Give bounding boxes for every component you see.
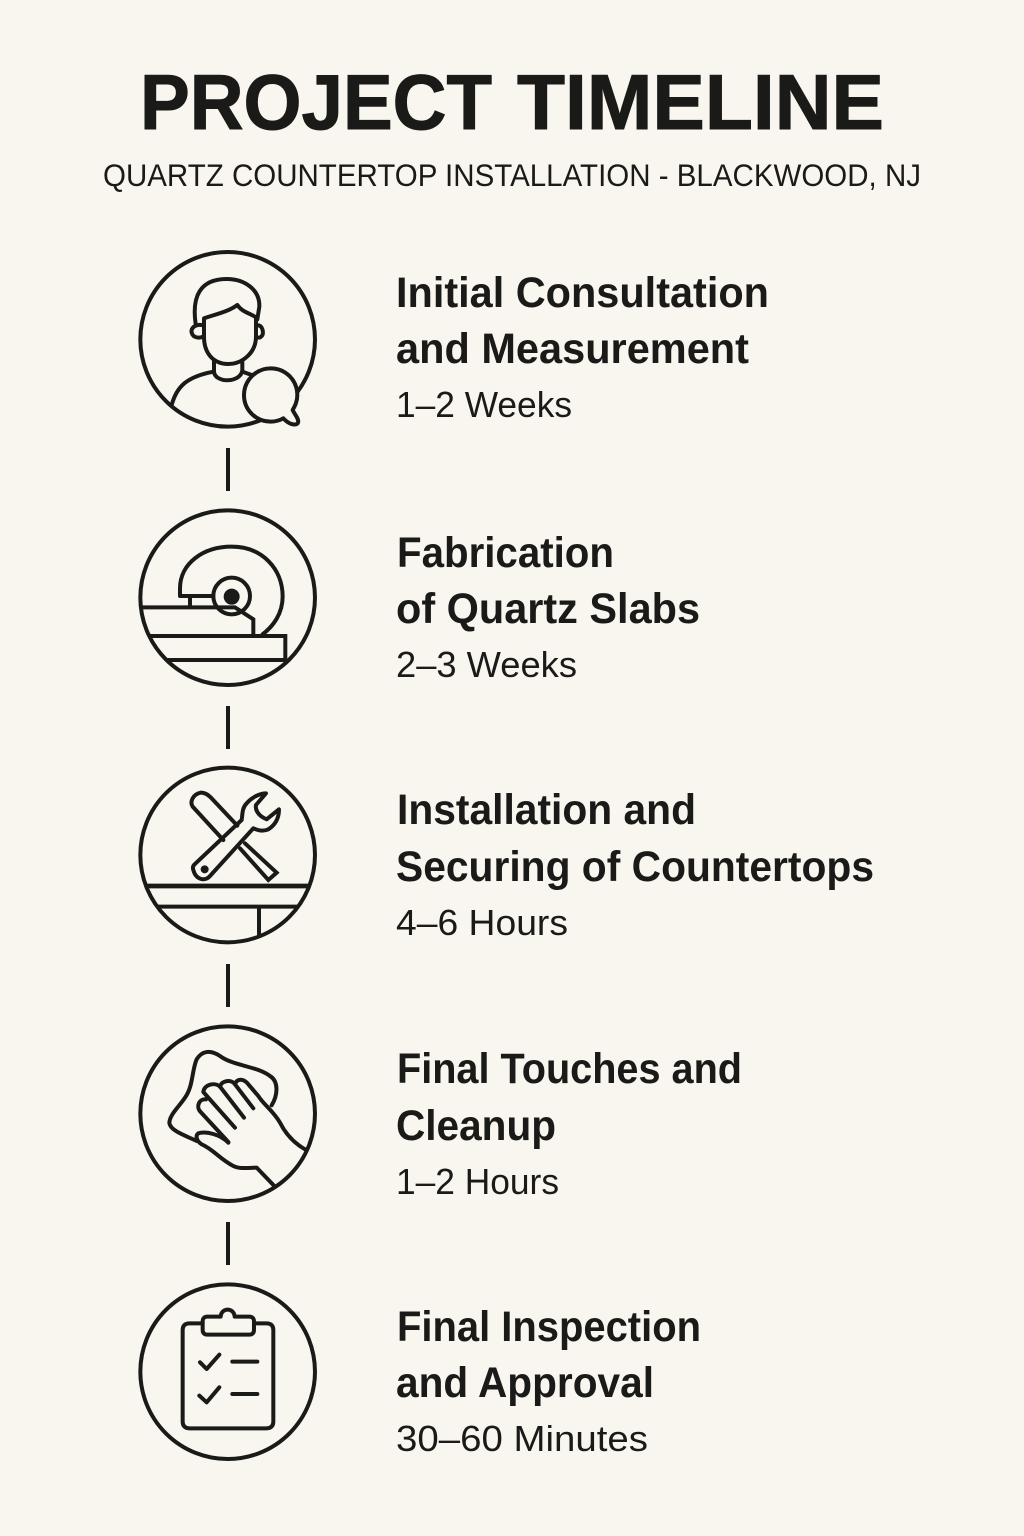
step 3 heading: Securing of Countertops: [396, 843, 874, 891]
icon: clipboard checklist: [140, 1284, 315, 1459]
step 3 heading: Installation and: [397, 786, 696, 834]
step 4 heading: Final Touches and: [397, 1045, 742, 1093]
step 4 duration: 1–2 Hours: [396, 1161, 559, 1202]
step 4 heading: [396, 1045, 742, 1150]
step 1 heading: Initial Consultation: [396, 269, 769, 317]
icon: crossed tools over countertop: [140, 768, 315, 942]
step 5 heading: Final Inspection: [397, 1303, 701, 1351]
connector 4: [226, 1222, 230, 1265]
step 5 duration: 30–60 Minutes: [396, 1418, 648, 1459]
icon: saw cutting slab: [140, 510, 315, 685]
step 2 heading: Fabrication: [397, 529, 614, 577]
step 2 heading: [396, 529, 700, 633]
step 5 heading: and Approval: [396, 1359, 654, 1407]
connector 1: [226, 448, 230, 491]
step 1 heading: [396, 269, 769, 373]
step 2 heading: of Quartz Slabs: [396, 585, 700, 633]
subtitle: QUARTZ COUNTERTOP INSTALLATION - BLACKWOOD, NJ: [103, 157, 921, 193]
step 5 heading: [396, 1303, 701, 1407]
step 3 duration: 4–6 Hours: [396, 902, 568, 943]
title: TIMELINE: [517, 58, 884, 146]
title: PROJECT: [140, 58, 492, 146]
step 1 heading: and Measurement: [396, 325, 749, 373]
icon: hand wiping with cloth: [140, 1026, 315, 1201]
connector 2: [226, 706, 230, 749]
step 2 duration: 2–3 Weeks: [396, 644, 577, 685]
connector 3: [226, 964, 230, 1007]
step 1 duration: 1–2 Weeks: [396, 384, 572, 425]
step 4 heading: Cleanup: [396, 1102, 556, 1150]
title: [140, 58, 884, 146]
step 3 heading: [396, 786, 874, 891]
icon: person with speech bubble: [140, 252, 315, 427]
